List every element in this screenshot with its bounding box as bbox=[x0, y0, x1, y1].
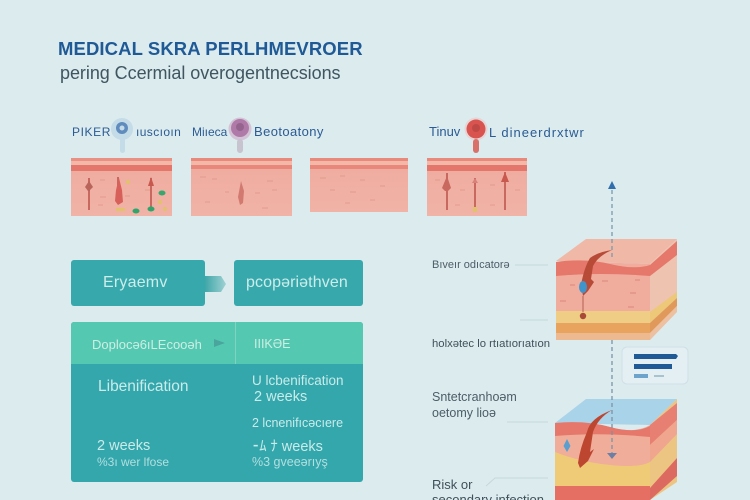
table header bbox=[71, 322, 363, 364]
label: stage 1 right: ıuscıoın bbox=[136, 125, 181, 139]
label: stage 3 left: Tinuv bbox=[429, 124, 460, 139]
panel: lower skin cube bbox=[555, 399, 677, 500]
table panel bbox=[71, 322, 363, 482]
arrow: vertical dashed bbox=[607, 181, 617, 459]
right cell item: 2 lcnenifıcəcıere bbox=[252, 416, 343, 430]
label: stage 2 right: Beotoatony bbox=[254, 124, 324, 139]
header arrow bbox=[214, 339, 225, 347]
label leader lines bbox=[486, 265, 548, 486]
label: barrier: Bıveır odıcatorə bbox=[432, 259, 510, 271]
box: erythema: Eryaemv bbox=[103, 274, 168, 291]
icon: magnifier 1 bbox=[111, 118, 133, 153]
header cell left: Doplocə6ıLEcooəh bbox=[92, 337, 202, 352]
label: dermal: Sntetcranhoəm bbox=[432, 390, 517, 404]
panel: stage 2 skin bbox=[191, 158, 292, 216]
label: risk: Risk or bbox=[432, 477, 472, 492]
label: stage 2 left: Miıeca bbox=[192, 125, 227, 139]
right cell note: %3 gveeərıyş bbox=[252, 455, 328, 469]
right cell term: U lcbenification bbox=[252, 373, 344, 388]
header cell right: IIIKƏE bbox=[254, 337, 290, 351]
label: keratin: holxətec lo rtıatıorıatıon bbox=[432, 338, 550, 350]
subtitle: pering Ccermial overogentnecsions bbox=[60, 63, 340, 83]
title: MEDICAL SKRA PERLHMEVROER bbox=[58, 38, 363, 59]
box: progression bbox=[234, 260, 363, 306]
icon: magnifier 2 bbox=[228, 118, 252, 153]
panel: stage 1 skin bbox=[71, 158, 172, 216]
label: stage 3 right: L dineerdrxtwr bbox=[489, 125, 585, 140]
icon: magnifier 3 bbox=[464, 118, 488, 153]
legend callout bbox=[622, 347, 688, 384]
left cell note: %3ı wer lfose bbox=[97, 455, 169, 469]
box: erythema bbox=[71, 260, 205, 306]
box: progression: pcopəriəthven bbox=[246, 274, 348, 291]
right cell weeks: ⁃ﾑ ﾅ weeks bbox=[252, 439, 323, 455]
left cell duration: 2 weeks bbox=[97, 438, 150, 454]
right cell duration: 2 weeks bbox=[254, 389, 307, 405]
arrow: flow connector bbox=[205, 276, 226, 292]
left cell term: Libenification bbox=[98, 378, 188, 395]
panel: stage 3 skin bbox=[310, 158, 408, 212]
label: stage 1 left: PIKER bbox=[72, 125, 111, 139]
panel: upper skin cube bbox=[556, 239, 677, 340]
panel: stage 4 skin bbox=[427, 158, 527, 216]
label: dermal line 2: oetomy lioə bbox=[432, 406, 496, 420]
column divider bbox=[235, 322, 236, 364]
